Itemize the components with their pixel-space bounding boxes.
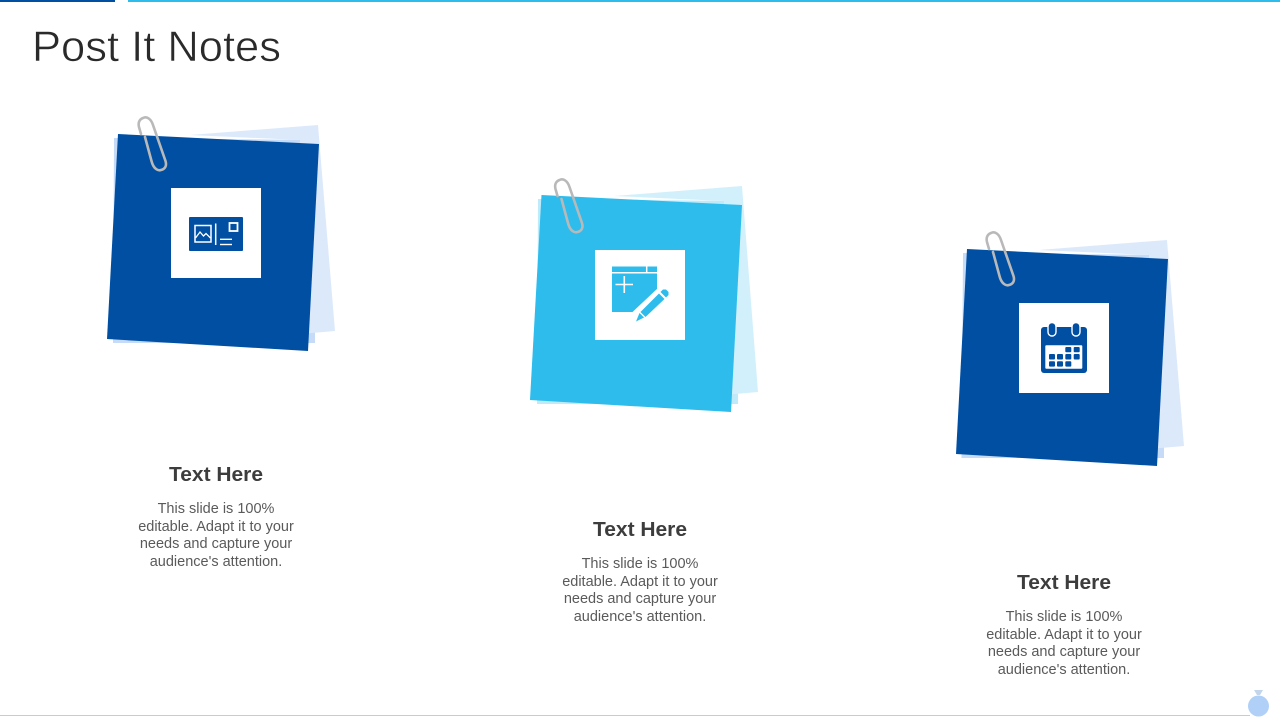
text block: note 1: editable. Adapt it to your: [138, 519, 294, 535]
icon: money bag: [1248, 690, 1269, 716]
text block: note 3: needs and capture your: [988, 644, 1140, 660]
icon box: note and pencil: [595, 250, 685, 340]
text block: note 2: audience's attention.: [574, 609, 706, 625]
text block: note 2: needs and capture your: [564, 591, 716, 607]
icon box: picture card: [171, 188, 261, 278]
text block: note 2: This slide is 100%: [582, 556, 699, 572]
icon: paperclip: [987, 232, 1014, 285]
text block: note 1: This slide is 100%: [158, 501, 275, 517]
icon: paperclip: [139, 117, 166, 170]
text block: note 3: This slide is 100%: [1006, 609, 1123, 625]
text block: note 1: needs and capture your: [140, 536, 292, 552]
text block: note 3: audience's attention.: [998, 662, 1130, 678]
panel: note 3: [956, 232, 1184, 466]
text block: note 2: Text Here: [593, 519, 687, 541]
title: Post It Notes: [32, 23, 281, 71]
panel: note 2: [530, 179, 758, 412]
top accent bar: [0, 0, 1280, 2]
text block: note 1: Text Here: [169, 464, 263, 486]
text block: note 1: audience's attention.: [150, 554, 282, 570]
icon: paperclip: [555, 179, 582, 232]
text block: note 2: editable. Adapt it to your: [562, 574, 718, 590]
text block: note 1: [138, 464, 294, 570]
footer line: [0, 715, 1250, 716]
icon box: calendar: [1019, 303, 1109, 393]
text block: note 2: [562, 519, 718, 625]
panel: note 1: [107, 117, 335, 351]
text block: note 3: editable. Adapt it to your: [986, 627, 1142, 643]
text block: note 3: [986, 572, 1142, 678]
text block: note 3: Text Here: [1017, 572, 1111, 594]
